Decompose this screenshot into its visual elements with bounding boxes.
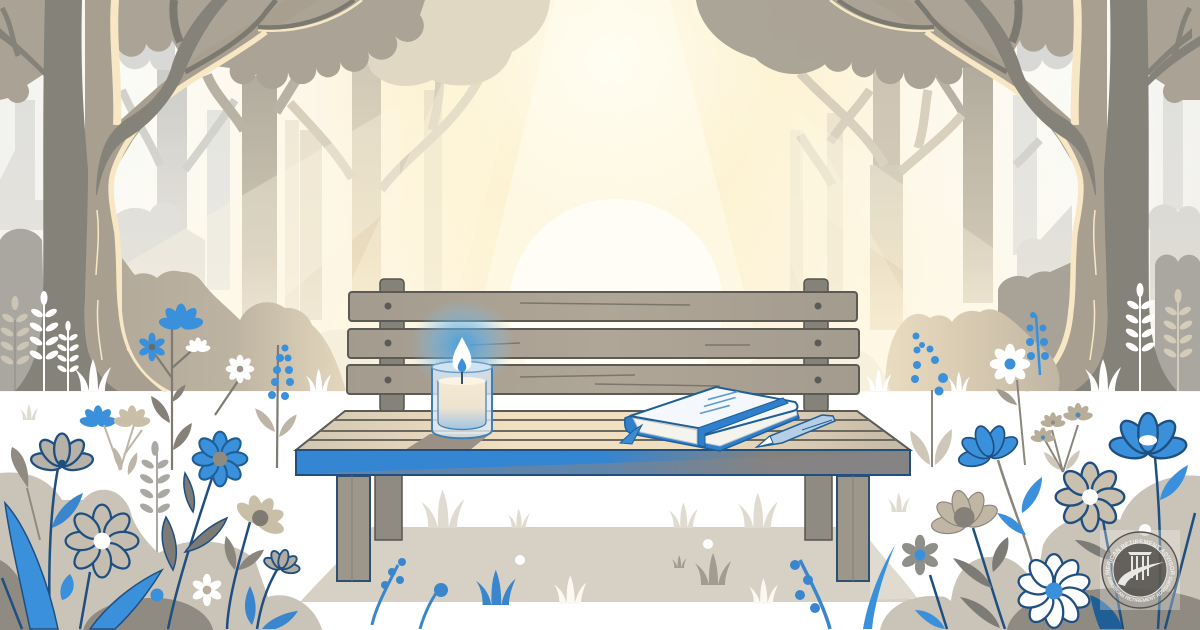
mid-ground trees — [207, 30, 993, 330]
bushes in front of trunks — [122, 258, 1060, 391]
backrest posts — [380, 279, 828, 412]
rail gray fade — [297, 451, 909, 474]
flower: gray-blue tulip — [30, 434, 94, 473]
flower: blue small — [138, 333, 166, 361]
flower: big white daisy — [1016, 554, 1092, 628]
front rail — [296, 450, 910, 475]
blue sprig — [790, 560, 820, 613]
front legs — [337, 476, 869, 581]
right edge canopy — [1165, 0, 1200, 100]
stems — [930, 457, 1195, 629]
notebook and pen — [620, 385, 835, 451]
upper right field flowers — [906, 312, 1093, 472]
left foreground tree — [0, 0, 425, 391]
rail lower wedge — [297, 451, 909, 474]
back legs — [375, 475, 832, 540]
mounds — [0, 472, 322, 630]
flower: white small upper — [185, 337, 211, 353]
sun — [509, 199, 723, 413]
ground — [0, 392, 1200, 630]
slat grain and bolts — [384, 302, 822, 386]
flower: blue tulip — [949, 415, 1023, 474]
candle — [432, 337, 492, 438]
blue spike — [268, 344, 294, 400]
upper meadow plants — [0, 283, 1194, 391]
leaves — [863, 465, 1188, 629]
background meadow plants — [20, 404, 910, 605]
flower: blue spiky top right — [1108, 413, 1188, 462]
left foreground flowers — [0, 432, 448, 630]
flower: white at stem — [226, 355, 254, 383]
flower: white upper — [990, 344, 1030, 384]
small tan flower — [113, 405, 151, 429]
background sky — [0, 0, 1200, 393]
pen — [757, 415, 835, 447]
stems — [2, 468, 278, 629]
logo seal: AMERICAN RETIREMENT ADVISORS — [1107, 576, 1172, 602]
small buds — [381, 558, 406, 589]
bushes behind trees — [0, 229, 1200, 391]
far background trees — [0, 30, 1200, 300]
bench seat — [296, 411, 910, 450]
logo seal: AMERICAN RETIREMENT ADVISORS — [1105, 539, 1175, 575]
flower: white small — [191, 574, 223, 606]
candle shadow — [405, 434, 490, 450]
mounds — [870, 540, 917, 600]
right foreground tree — [767, 0, 1192, 391]
small blue flower — [79, 405, 117, 429]
flower: tan — [923, 481, 1003, 541]
flower: tan — [231, 485, 296, 542]
right foreground flowers — [790, 413, 1200, 630]
flower: bud — [261, 545, 304, 577]
backrest slats — [347, 292, 859, 394]
upper left field flowers — [79, 304, 300, 560]
candle glow — [410, 299, 514, 391]
gray sprig — [139, 441, 171, 515]
dirt path — [300, 527, 915, 602]
right edge branch — [1146, 36, 1200, 86]
flower: tan daisy — [1056, 463, 1124, 531]
sun rays — [0, 0, 1200, 393]
flower: large tan daisy — [66, 505, 138, 577]
flower: blue top — [158, 304, 204, 332]
flower: blue daisy — [193, 432, 247, 486]
bench — [296, 279, 910, 581]
logo seal — [1100, 530, 1180, 610]
canopy foliage — [355, 0, 879, 86]
seat slat lines — [309, 420, 896, 440]
flower: small tan group — [1063, 403, 1093, 422]
flower: gray-blue — [900, 535, 940, 575]
leaves — [5, 473, 298, 629]
